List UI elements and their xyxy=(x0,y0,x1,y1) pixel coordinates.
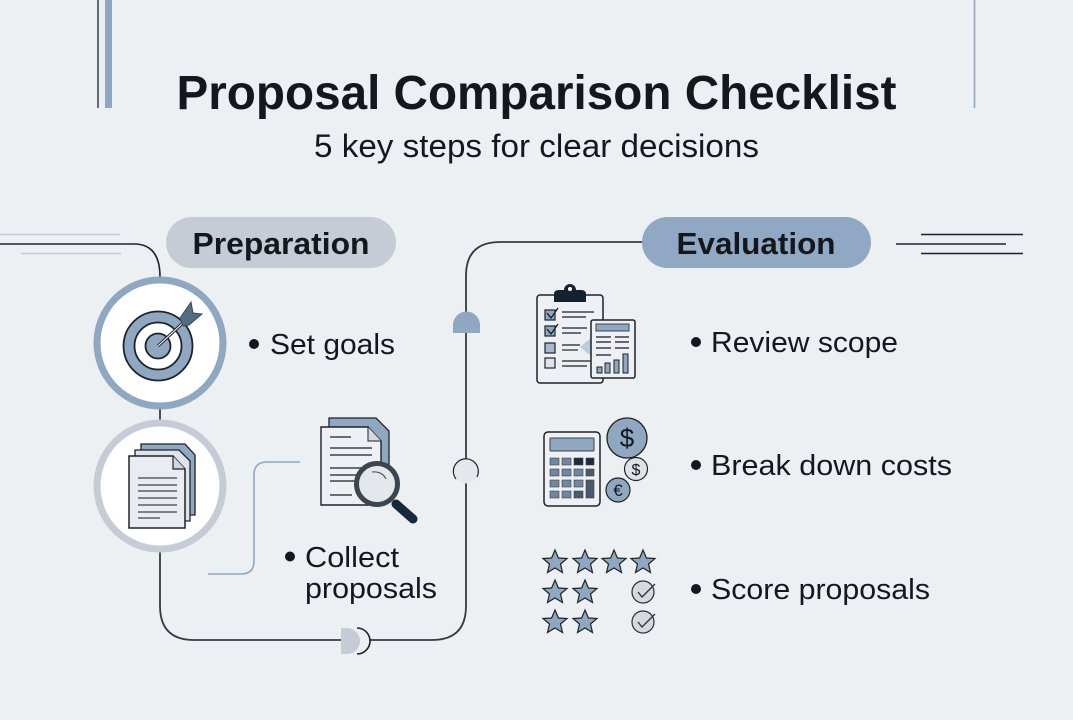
text: Review scope: Review scope xyxy=(711,327,898,359)
pill: Preparation: Preparation xyxy=(192,226,370,261)
subtitle: 5 key steps for clear decisions xyxy=(314,128,759,164)
icon: document with magnifier xyxy=(321,418,413,519)
connector: collect proposals xyxy=(208,462,300,574)
icon: calculator and coins: $ xyxy=(632,462,641,479)
icon: calculator and coins: $ xyxy=(620,423,635,453)
icon: calculator and coins: € xyxy=(613,481,623,500)
node: half circle top xyxy=(453,312,480,333)
icon: star ratings xyxy=(543,550,655,633)
title: Proposal Comparison Checklist xyxy=(176,67,897,120)
text: Collect proposals xyxy=(285,542,437,605)
text: Break down costs: Break down costs xyxy=(711,450,952,482)
icon: calculator and coins xyxy=(544,418,648,506)
icon: target xyxy=(97,280,223,406)
node: bottom half circles xyxy=(341,628,370,654)
pill: Evaluation xyxy=(642,217,871,268)
icon: documents circle xyxy=(97,423,223,549)
text: Collect proposals: proposals xyxy=(305,573,437,605)
right decorative lines xyxy=(896,234,1023,254)
icon: clipboard and report xyxy=(537,284,635,383)
text: Score proposals: Score proposals xyxy=(711,574,930,606)
pill: Preparation xyxy=(166,217,396,268)
text: Collect proposals: Collect xyxy=(305,542,399,574)
pill: Evaluation: Evaluation xyxy=(676,226,836,261)
text: Set goals: Set goals xyxy=(270,329,395,361)
left connector line xyxy=(0,234,645,640)
node: middle circle xyxy=(453,458,478,484)
